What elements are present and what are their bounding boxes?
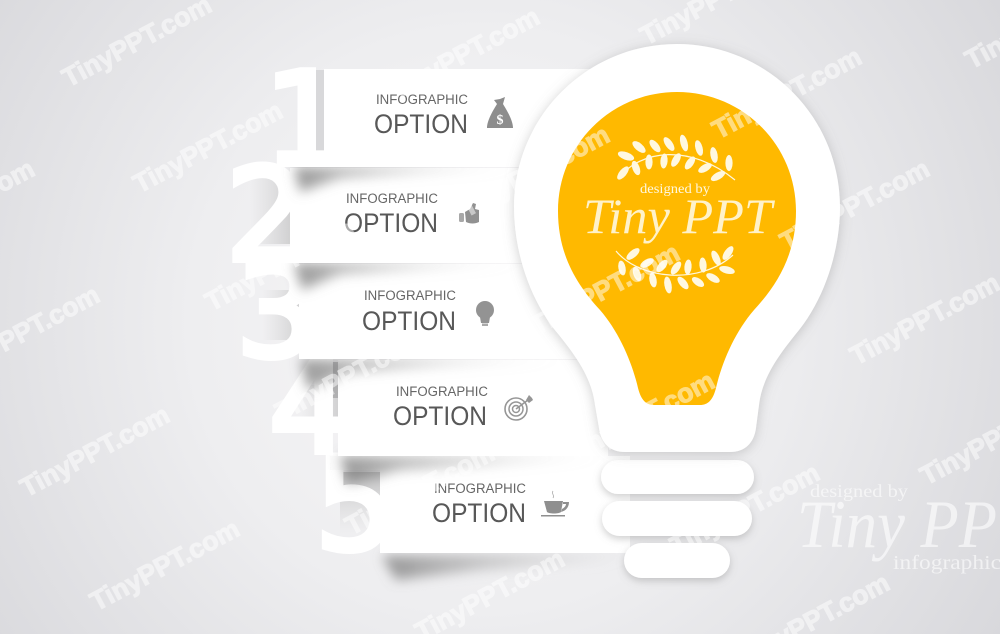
- text: option 5: OPTION: [432, 498, 526, 528]
- icon: money bag: $: [496, 113, 504, 128]
- panel: option 4: [269, 334, 610, 484]
- panel: option 1: [264, 46, 600, 195]
- logo line: designed by: designed by: [640, 181, 710, 196]
- watermark: repeated TinyPPT.com: TinyPPT.com: [525, 237, 684, 341]
- number 5: 5: [315, 431, 396, 580]
- text: option 2: INFOGRAPHIC: [346, 191, 438, 206]
- shadow below option 5: [382, 552, 640, 580]
- watermark: repeated TinyPPT.com: TinyPPT.com: [340, 437, 499, 541]
- icon: coffee cup: [541, 491, 569, 516]
- number 1: 1: [264, 46, 345, 195]
- watermark: repeated TinyPPT.com: TinyPPT.com: [775, 153, 934, 257]
- text: option 3: INFOGRAPHIC: [364, 288, 456, 303]
- text: option 3: [362, 288, 456, 336]
- text: option 3: OPTION: [362, 306, 456, 336]
- text: option 1: [374, 92, 468, 139]
- watermark: repeated TinyPPT.com: TinyPPT.com: [845, 267, 1000, 371]
- watermark: repeated TinyPPT.com: TinyPPT.com: [15, 399, 174, 503]
- text: option 2: OPTION: [344, 208, 438, 238]
- watermark: repeated TinyPPT.com: TinyPPT.com: [455, 119, 614, 223]
- panel: option 5: [315, 431, 640, 580]
- text: option 4: INFOGRAPHIC: [396, 384, 488, 399]
- icon: thumbs up: [459, 203, 479, 224]
- shadow below option 2: [294, 263, 530, 290]
- text: option 2: [344, 191, 438, 238]
- shadow below option 3: [300, 359, 570, 390]
- watermark: repeated TinyPPT.com: TinyPPT.com: [665, 457, 824, 561]
- icon: light bulb: [476, 301, 494, 326]
- logo: designed by TinyPPT: [583, 134, 775, 294]
- number 4: 4: [269, 334, 350, 483]
- shadow below option 1: [294, 167, 530, 192]
- text: option 5: [432, 481, 526, 528]
- watermark: repeated TinyPPT.com: TinyPPT.com: [200, 213, 359, 317]
- panel: option 2: [226, 142, 540, 291]
- icon: money bag: [487, 97, 513, 128]
- watermark: repeated TinyPPT.com: TinyPPT.com: [128, 95, 287, 199]
- watermark: repeated TinyPPT.com: TinyPPT.com: [560, 365, 719, 469]
- wreath top: [615, 134, 735, 183]
- bulb yellow centre: [558, 92, 796, 405]
- number 2: 2: [226, 142, 307, 291]
- bulb outer shape: [514, 44, 840, 452]
- panel: option 3: [236, 238, 591, 390]
- wreath bottom: [616, 244, 736, 294]
- watermark: corner logo: infographic: [893, 553, 1000, 574]
- text: option 1: INFOGRAPHIC: [376, 92, 468, 107]
- watermark: repeated TinyPPT.com: TinyPPT.com: [270, 323, 429, 427]
- text: option 4: [393, 384, 488, 431]
- text: option 1: OPTION: [374, 109, 468, 139]
- shadow below option 4: [340, 456, 610, 484]
- text: option 4: OPTION: [393, 401, 487, 431]
- logo script: Tiny PPT: Tiny PPT: [583, 188, 775, 244]
- watermark: repeated TinyPPT.com: TinyPPT.com: [85, 513, 244, 617]
- watermark: repeated TinyPPT.com: TinyPPT.com: [707, 41, 866, 145]
- watermark: repeated TinyPPT.com: TinyPPT.com: [385, 1, 544, 105]
- text: option 5: INFOGRAPHIC: [434, 481, 526, 496]
- number 3: 3: [236, 238, 317, 387]
- watermark: corner logo: designed by: [810, 481, 908, 501]
- icon: target: [505, 395, 533, 420]
- bulb base segments: [601, 460, 754, 578]
